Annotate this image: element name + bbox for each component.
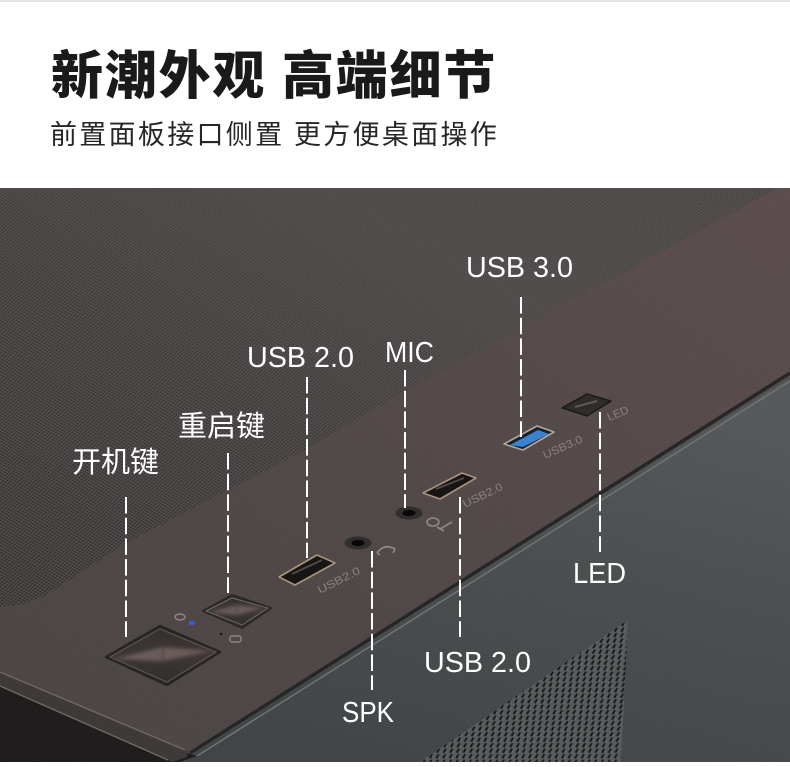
- callout: power key: 开机键: [72, 446, 159, 479]
- mic jack: [396, 506, 422, 520]
- callout: usb 3.0: USB 3.0: [466, 252, 573, 284]
- side perforated vent: [420, 620, 628, 762]
- icon: headphone: [377, 547, 395, 555]
- subtitle: 更方便桌面操作: [294, 120, 499, 150]
- reset pinhole: [220, 633, 222, 635]
- led silk label: LED: [606, 404, 631, 424]
- callout: spk: SPK: [342, 697, 395, 729]
- icon: blue led: [189, 621, 195, 625]
- top rule: [0, 0, 790, 2]
- usb 3.0 port: [504, 426, 554, 450]
- subtitle: 前置面板接口侧置: [50, 120, 284, 150]
- case side body: [176, 378, 790, 762]
- spk jack: [344, 536, 372, 550]
- title: 高端细节: [282, 48, 497, 106]
- callout: usb 2.0 left: USB 2.0: [247, 342, 354, 374]
- usb 2.0 left silk label: USB2.0: [316, 565, 362, 597]
- usb 2.0 right silk label: USB2.0: [461, 481, 505, 511]
- callout: usb 2.0 right: USB 2.0: [424, 647, 531, 679]
- usb 3.0 silk label: USB3.0: [541, 434, 585, 462]
- icon: reset: [230, 636, 241, 642]
- usb 2.0 right port: [423, 473, 476, 499]
- front plate: [0, 188, 790, 753]
- usb 2.0 left port: [279, 555, 335, 585]
- reset button: [203, 595, 271, 628]
- callout: led: LED: [573, 558, 626, 590]
- icon: power: [175, 614, 185, 620]
- led window: [562, 394, 611, 416]
- icon: microphone: [427, 518, 452, 531]
- lower-left bevel and dark underside: [0, 672, 197, 762]
- noise texture: [0, 188, 790, 762]
- photo: front panel of PC case: [0, 188, 790, 762]
- callout: mic: MIC: [385, 337, 434, 369]
- plate edge, lower right: [190, 373, 790, 756]
- power button: [106, 626, 220, 685]
- mesh top panel: [0, 188, 790, 618]
- title: 新潮外观: [51, 48, 266, 106]
- callout: reset key: 重启键: [178, 410, 265, 443]
